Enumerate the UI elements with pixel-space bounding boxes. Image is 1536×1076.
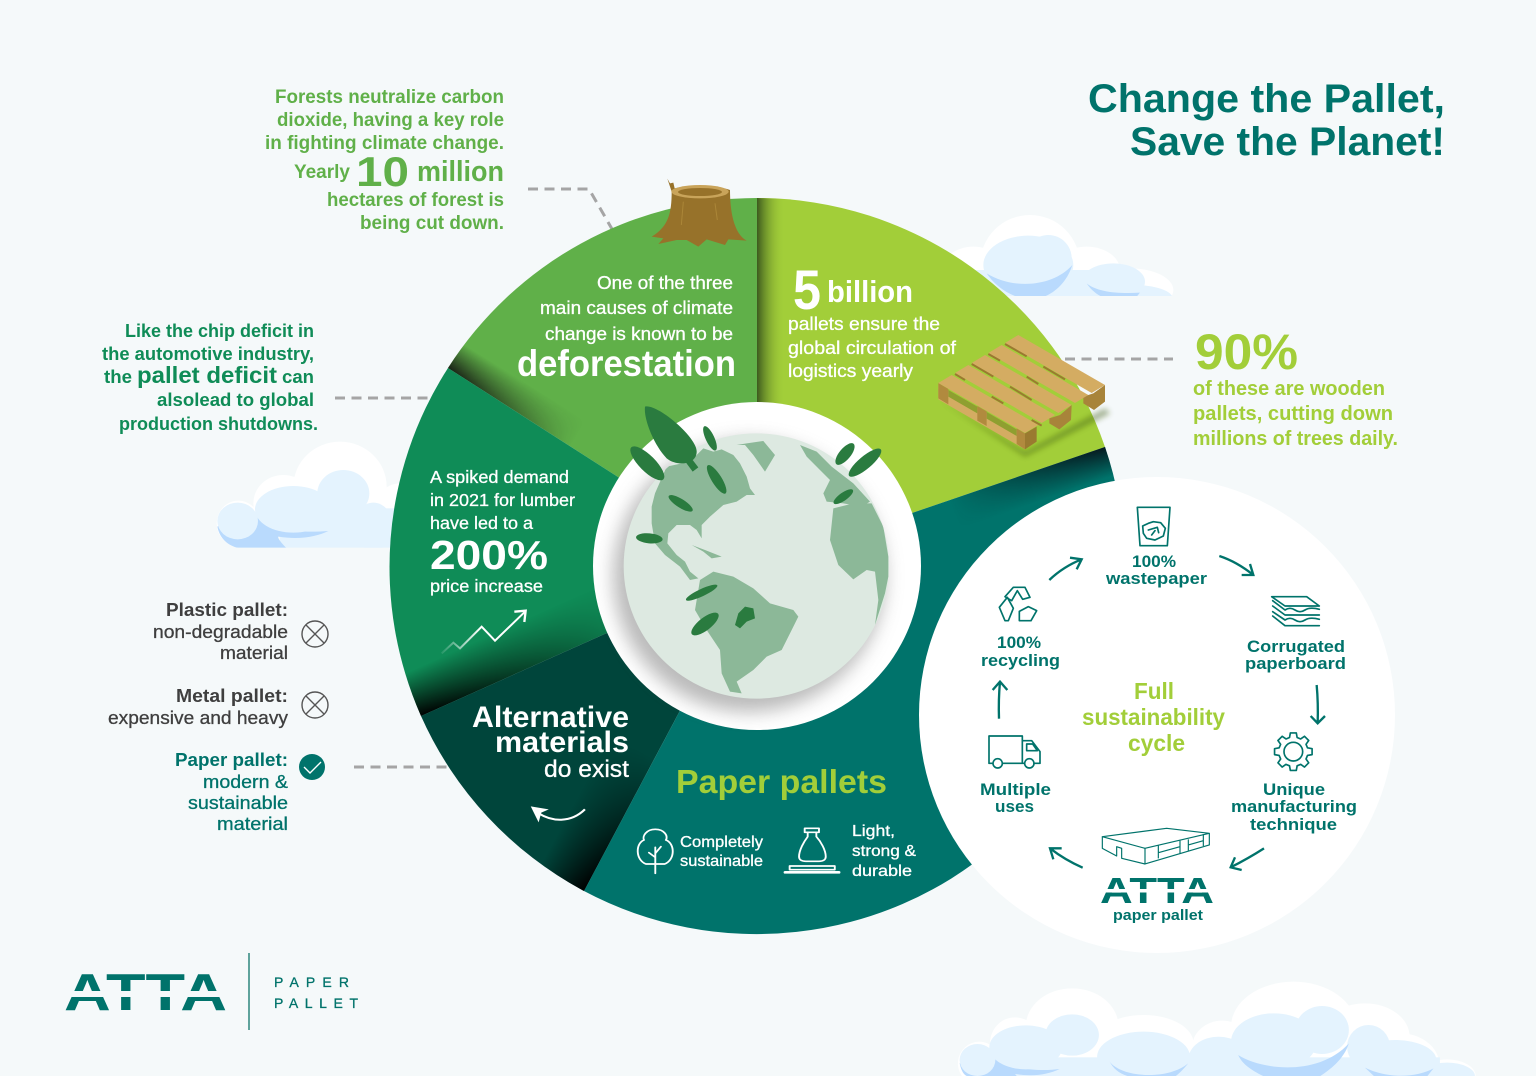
icon: recycling bbox=[999, 587, 1037, 621]
cycle step labels: recycling bbox=[981, 651, 1060, 670]
legend item: paper pallet: sustainable bbox=[188, 792, 288, 813]
cloud: left bbox=[217, 442, 399, 548]
segment: deforestation: main causes of climate bbox=[540, 298, 733, 318]
segment: paper pallets bbox=[584, 447, 1115, 934]
title: Change the Pallet, bbox=[1088, 77, 1445, 121]
segment: deforestation bbox=[448, 198, 757, 478]
segment: deforestation: deforestation bbox=[517, 343, 736, 384]
globe bbox=[593, 402, 921, 730]
title: Save the Planet! bbox=[1130, 120, 1445, 164]
logo tagline bbox=[274, 974, 358, 1011]
pallet deck planks bbox=[938, 335, 1105, 433]
segment: 5 billion pallets: billion bbox=[827, 274, 913, 309]
icon: wastepaper bin bbox=[1137, 507, 1170, 546]
segment: paper pallets: Paper pallets bbox=[676, 763, 887, 800]
icon: tree bbox=[638, 829, 673, 873]
cycle step labels: 100% bbox=[1132, 552, 1176, 571]
legend item: paper pallet bbox=[175, 749, 325, 834]
icon: weight on pallet bbox=[785, 828, 839, 872]
text block: forests: dioxide, having a key role bbox=[277, 109, 504, 131]
segment: alternative materials: Alternative bbox=[472, 701, 629, 734]
segment: alternative materials: do exist bbox=[544, 756, 629, 783]
legend item: metal pallet: expensive and heavy bbox=[108, 707, 289, 728]
legend: pallet materials bbox=[108, 599, 328, 834]
cycle step labels: Multiple bbox=[980, 780, 1051, 799]
text block: pallet deficit: pallet deficit bbox=[137, 362, 277, 388]
segment: deforestation: change is known to be bbox=[545, 324, 733, 344]
segment: 5 billion pallets bbox=[757, 198, 1105, 566]
icon: corrugated paperboard bbox=[1272, 597, 1319, 626]
icon: curved arrow bbox=[531, 806, 585, 822]
legend item: paper pallet: Paper pallet: bbox=[175, 749, 288, 770]
white circle bbox=[919, 477, 1395, 953]
text block: forests: Forests neutralize carbon bbox=[275, 86, 504, 108]
icon: wooden pallet bbox=[938, 335, 1110, 457]
logo tagline: PAPER bbox=[274, 974, 349, 990]
cycle logo: ATTA bbox=[1100, 870, 1214, 911]
segment: alternative materials: materials bbox=[495, 726, 629, 759]
white disc bbox=[593, 402, 921, 730]
logo tagline: PALLET bbox=[274, 995, 358, 1011]
title bbox=[1088, 77, 1445, 164]
text block: forests: in fighting climate change. bbox=[265, 132, 504, 154]
cycle step labels bbox=[980, 552, 1357, 924]
segment: lumber demand: A spiked demand bbox=[430, 467, 569, 487]
legend item: plastic pallet: Plastic pallet: bbox=[166, 599, 288, 620]
cycle step labels: wastepaper bbox=[1105, 569, 1207, 588]
text block: pallet deficit: can bbox=[282, 366, 314, 387]
text block: 90 percent wooden pallets: 90% bbox=[1195, 324, 1298, 380]
globe shadow bbox=[613, 440, 885, 712]
cycle step labels: Corrugated bbox=[1247, 637, 1345, 656]
segment: lumber demand: have led to a bbox=[430, 513, 533, 533]
cycle step labels: paper pallet bbox=[1113, 907, 1203, 924]
legend item: paper pallet: modern & bbox=[203, 771, 289, 792]
icon: gear bbox=[1275, 733, 1312, 770]
segment: paper pallets: strong & bbox=[852, 843, 917, 860]
cycle step labels: manufacturing bbox=[1231, 797, 1357, 816]
connector lines bbox=[335, 189, 1173, 767]
cycle centre heading: Full bbox=[1134, 678, 1174, 704]
segment: 5 billion pallets: logistics yearly bbox=[788, 361, 913, 381]
text block: 90 percent wooden pallets bbox=[1193, 324, 1398, 450]
cycle step labels: technique bbox=[1250, 815, 1337, 834]
cycle step labels: 100% bbox=[997, 633, 1041, 652]
text block: pallet deficit: the bbox=[104, 366, 132, 387]
cloud: bottom right bbox=[958, 982, 1476, 1076]
logo: ATTA paper pallet bbox=[60, 953, 358, 1030]
segment: 5 billion pallets: 5 bbox=[793, 258, 821, 321]
text block: pallet deficit bbox=[102, 320, 318, 434]
segment: paper pallets: Light, bbox=[852, 823, 895, 840]
icon: delivery truck bbox=[989, 736, 1040, 768]
legend item: metal pallet: Metal pallet: bbox=[176, 685, 288, 706]
icon: paper pallet bbox=[1102, 828, 1209, 864]
text block: forests: million bbox=[417, 156, 504, 188]
text block: pallet deficit: production shutdowns. bbox=[119, 413, 318, 434]
segment: paper pallets: sustainable bbox=[680, 853, 763, 870]
legend item: plastic pallet: material bbox=[220, 642, 288, 663]
legend item: plastic pallet bbox=[153, 599, 328, 663]
text block: 90 percent wooden pallets: of these are wooden bbox=[1193, 377, 1385, 400]
text block: forests: being cut down. bbox=[360, 212, 504, 234]
globe sphere and continents bbox=[624, 406, 889, 699]
trees on globe bbox=[626, 406, 885, 639]
segment: 5 billion pallets: pallets ensure the bbox=[788, 314, 940, 334]
cloud: top right bbox=[952, 215, 1173, 296]
cycle centre heading: sustainability bbox=[1082, 704, 1225, 730]
text block: forests: hectares of forest is bbox=[327, 189, 504, 211]
pallet stringer marks bbox=[955, 344, 1065, 426]
cycle arrows bbox=[993, 556, 1325, 870]
pie chart bbox=[380, 190, 1140, 950]
legend item: plastic pallet: non-degradable bbox=[153, 621, 288, 642]
text block: pallet deficit: Like the chip deficit in bbox=[125, 320, 314, 341]
text block: pallet deficit: alsolead to global bbox=[157, 389, 314, 410]
segment: lumber demand: in 2021 for lumber bbox=[430, 490, 575, 510]
cycle step labels: Unique bbox=[1263, 780, 1325, 799]
cycle step labels: uses bbox=[995, 797, 1034, 816]
panel: sustainability cycle bbox=[919, 477, 1395, 953]
pallet base bbox=[938, 383, 1105, 449]
icon: rising trend arrow bbox=[442, 611, 526, 653]
text block: 90 percent wooden pallets: pallets, cutting down bbox=[1193, 402, 1393, 425]
cycle centre heading: cycle bbox=[1128, 730, 1185, 756]
segment: paper pallets: durable bbox=[852, 863, 912, 880]
segment: paper pallets: Completely bbox=[680, 834, 763, 851]
segment: 5 billion pallets: global circulation of bbox=[788, 338, 957, 358]
pallet shadow bbox=[940, 400, 1110, 457]
icon: tree stump bbox=[652, 179, 747, 247]
text block: 90 percent wooden pallets: millions of trees daily. bbox=[1193, 427, 1398, 450]
cycle centre heading bbox=[1082, 678, 1225, 756]
legend item: metal pallet bbox=[108, 685, 328, 728]
segment: lumber demand: price increase bbox=[430, 576, 543, 596]
logo wordmark: ATTA bbox=[64, 964, 227, 1022]
segment: lumber demand bbox=[390, 368, 619, 716]
segment: lumber demand: 200% bbox=[430, 532, 548, 578]
legend item: paper pallet: material bbox=[217, 813, 288, 834]
segment: alternative materials bbox=[421, 632, 680, 891]
segment: deforestation: One of the three bbox=[597, 273, 733, 293]
text block: forests bbox=[265, 86, 504, 234]
text block: forests: 10 bbox=[356, 148, 409, 195]
text block: forests: Yearly bbox=[294, 161, 350, 183]
text block: pallet deficit: the automotive industry, bbox=[102, 343, 314, 364]
cycle step labels: paperboard bbox=[1245, 654, 1346, 673]
